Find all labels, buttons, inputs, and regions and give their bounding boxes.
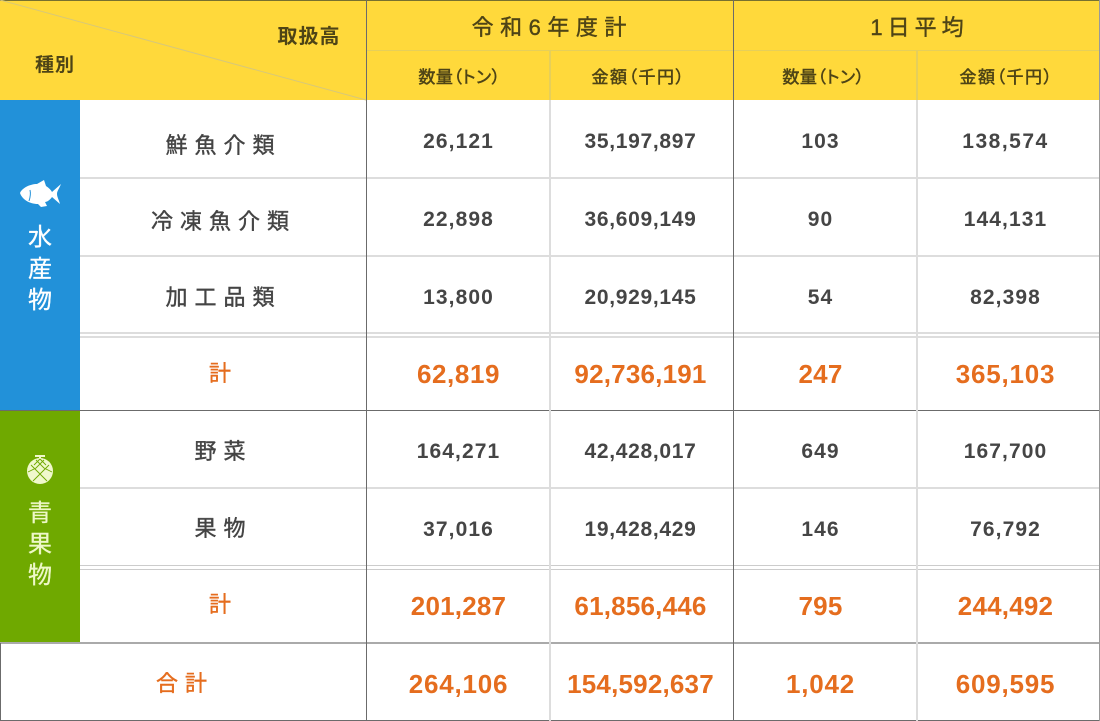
label: seafood 3: 物 — [28, 287, 52, 314]
row: vegetable values: 42,428,017 — [584, 440, 697, 463]
row: fresh fish values: 35,197,897 — [584, 130, 697, 153]
row label: produce subtotal: 計 — [209, 592, 238, 617]
row: seafood subtotal values — [417, 359, 1055, 389]
row: frozen fish values: 90 — [808, 208, 833, 231]
row: fruit values: 146 — [801, 518, 840, 541]
label: seafood 2: 産 — [28, 256, 52, 283]
row label: fruit: 果物 — [194, 516, 252, 541]
row: produce subtotal values — [411, 591, 1053, 621]
row: vegetable values — [417, 440, 1047, 463]
row: produce subtotal values: 795 — [798, 591, 842, 621]
row: seafood subtotal values: 247 — [798, 359, 842, 389]
row: produce subtotal values: 244,492 — [958, 591, 1053, 621]
row label: frozen fish: 冷凍魚介類 — [151, 209, 296, 234]
row: seafood subtotal values: 62,819 — [417, 359, 500, 389]
row: vegetable values: 649 — [801, 440, 840, 463]
icon: fish — [20, 180, 61, 207]
column heading: quantity: 数量（トン） — [418, 68, 501, 87]
row: frozen fish values: 144,131 — [964, 208, 1047, 231]
row: processed values: 20,929,145 — [584, 286, 697, 309]
row: fruit values: 76,792 — [970, 518, 1041, 541]
row: fresh fish values: 26,121 — [423, 130, 494, 153]
label: produce 3: 物 — [28, 562, 52, 589]
column heading: daily quantity: 数量（トン） — [782, 68, 865, 87]
row: fruit values — [423, 518, 1041, 541]
row: fruit values: 19,428,429 — [584, 518, 697, 541]
label: seafood: 水 — [28, 224, 52, 251]
row label: fresh fish: 鮮魚介類 — [165, 133, 282, 158]
panel: seafood category — [0, 100, 80, 411]
label: produce 2: 果 — [28, 531, 52, 558]
row: processed values — [423, 286, 1041, 309]
row: grand total values: 264,106 — [409, 669, 508, 699]
row label: processed: 加工品類 — [165, 285, 282, 310]
row: vegetable values: 164,271 — [417, 440, 500, 463]
row: fresh fish values: 138,574 — [962, 130, 1049, 153]
row: vegetable values: 167,700 — [964, 440, 1047, 463]
column heading: daily amount: 金額（千円） — [960, 68, 1054, 87]
header band — [0, 0, 1100, 100]
row: produce subtotal values: 61,856,446 — [574, 591, 707, 621]
row: seafood subtotal values: 92,736,191 — [574, 359, 707, 389]
row label: vegetables: 野菜 — [194, 439, 252, 464]
row: grand total values: 1,042 — [786, 669, 855, 699]
icon: melon — [27, 455, 53, 484]
row: fresh fish values — [423, 130, 1049, 153]
row: produce subtotal values: 201,287 — [411, 591, 506, 621]
row label: grand total: 合計 — [156, 671, 214, 696]
heading: reiwa 6 total: 令和6年度計 — [472, 15, 633, 40]
row: processed values: 54 — [808, 286, 833, 309]
row label: seafood subtotal: 計 — [209, 361, 238, 386]
column heading: amount: 金額（千円） — [592, 68, 686, 87]
heading: daily average: 1日平均 — [870, 15, 969, 40]
row: fruit values: 37,016 — [423, 518, 494, 541]
label: produce: 青 — [28, 500, 52, 527]
row: fresh fish values: 103 — [801, 130, 840, 153]
row: grand total values: 154,592,637 — [567, 669, 714, 699]
row: processed values: 13,800 — [423, 286, 494, 309]
row: frozen fish values: 36,609,149 — [584, 208, 697, 231]
row: processed values: 82,398 — [970, 286, 1041, 309]
panel: produce category — [0, 411, 80, 643]
row: grand total values — [409, 669, 1055, 699]
row: seafood subtotal values: 365,103 — [956, 359, 1055, 389]
row: frozen fish values — [423, 208, 1047, 231]
row: grand total values: 609,595 — [956, 669, 1055, 699]
heading: category: 種別 — [35, 55, 75, 76]
row: frozen fish values: 22,898 — [423, 208, 494, 231]
heading: handled volume: 取扱高 — [278, 26, 340, 48]
